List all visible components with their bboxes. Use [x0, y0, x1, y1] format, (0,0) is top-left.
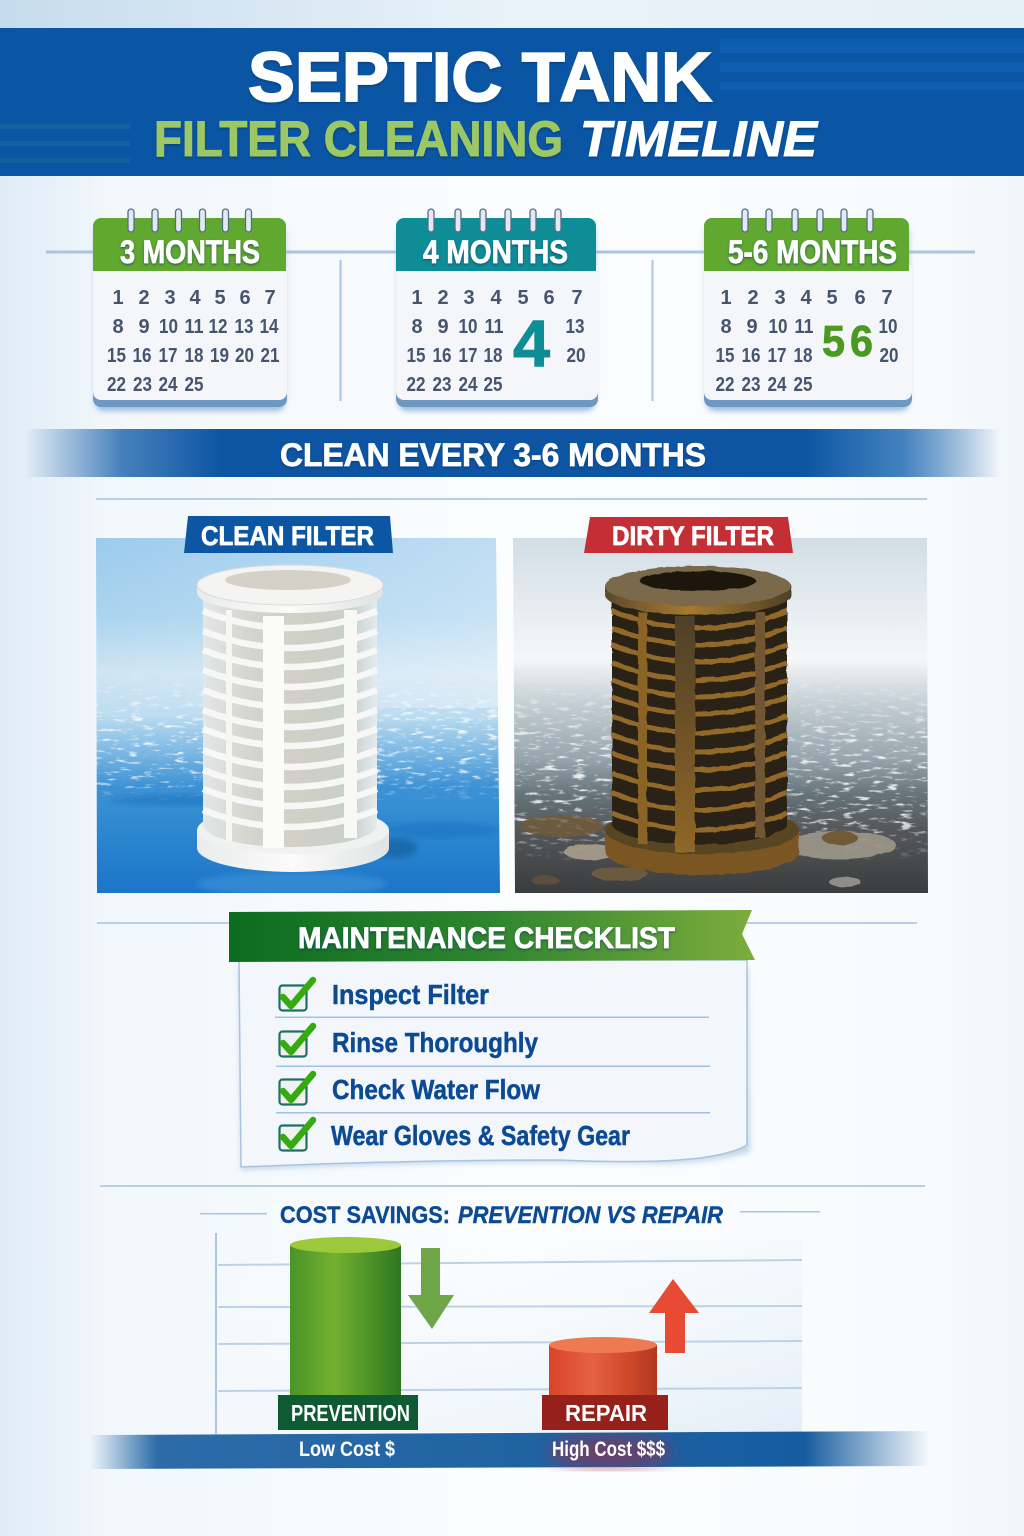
illustration: clean filter cartridge: [197, 565, 389, 872]
bar: repair: [549, 1337, 657, 1400]
label: dirty filter: DIRTY FILTER: [612, 521, 774, 551]
dates: 2: [747, 287, 759, 309]
dates: 8: [720, 316, 732, 338]
top background strip: [0, 0, 1024, 28]
dates: 10: [878, 316, 898, 338]
dates: 7: [264, 287, 276, 309]
photo: murky water: [510, 538, 935, 893]
label: clean filter: CLEAN FILTER: [201, 521, 374, 551]
section divider: [100, 1185, 925, 1187]
dates: 16: [432, 345, 452, 367]
dates: 24: [158, 374, 178, 396]
dates: 7: [881, 287, 893, 309]
dates: 2: [437, 287, 449, 309]
dates: 18: [794, 345, 812, 367]
calendar: 4 months: [396, 209, 598, 411]
bar: prevention: [290, 1237, 401, 1400]
illustration: clogged filter cartridge: [605, 566, 799, 875]
dates: 20: [566, 345, 586, 367]
dates: 23: [432, 374, 452, 396]
photo: clean water: [90, 538, 510, 896]
highlighted dates 5 6: 6: [850, 317, 873, 366]
dates: 1: [411, 287, 423, 309]
dates: 20: [880, 345, 898, 367]
dates: 15: [406, 345, 426, 367]
panel: clean filter: [90, 516, 510, 896]
dates: 3: [164, 287, 176, 309]
section divider: [96, 498, 927, 500]
dates: 25: [484, 374, 502, 396]
dates: 10: [458, 316, 478, 338]
dates: 3: [463, 287, 475, 309]
chart heading: COST SAVINGS:: [280, 1202, 450, 1229]
label: repair: [542, 1395, 668, 1430]
section divider: [97, 922, 917, 924]
frequency text: CLEAN EVERY 3-6 MONTHS: [280, 437, 706, 473]
divider left: [340, 260, 342, 401]
dates: 23: [133, 374, 152, 396]
dates: 17: [768, 345, 786, 367]
dates: 1: [720, 287, 732, 309]
calendar: 3 months: [93, 209, 287, 411]
panel: dirty filter: [510, 517, 935, 893]
dates: 6: [239, 287, 251, 309]
arrow: cost up: [649, 1279, 699, 1353]
dates: 9: [138, 316, 150, 338]
dates: 19: [210, 345, 229, 367]
caption: high cost: High Cost $$$: [552, 1438, 665, 1461]
dates: 18: [184, 345, 204, 367]
frequency banner: [25, 429, 1000, 477]
dates: 10: [159, 316, 178, 338]
divider right: [652, 260, 654, 401]
dates: [406, 287, 586, 396]
bar chart: prevention vs repair: [90, 1233, 930, 1469]
dates: 15: [107, 345, 126, 367]
dates: 6: [543, 287, 555, 309]
dates: [716, 287, 898, 396]
dates: 22: [716, 374, 734, 396]
subtitle: FILTER CLEANING: [154, 111, 563, 167]
dates: 4: [189, 287, 201, 309]
label: repair: REPAIR: [565, 1400, 647, 1426]
dates: 18: [484, 345, 502, 367]
timeline line: [46, 250, 975, 254]
checklist item: wear gloves: Wear Gloves & Safety Gear: [331, 1120, 630, 1151]
checklist item: inspect filter: [280, 979, 489, 1010]
rings: [428, 209, 561, 232]
label: prevention: [278, 1395, 418, 1430]
dates: 14: [260, 316, 279, 338]
header banner: [0, 28, 1024, 176]
rings: [742, 209, 873, 232]
dates: 9: [746, 316, 758, 338]
dates: 16: [742, 345, 760, 367]
dates: 11: [484, 316, 504, 338]
dates: 4: [800, 287, 812, 309]
dates: 1: [112, 287, 124, 309]
dates: 8: [112, 316, 124, 338]
highlighted dates 5 6: 5: [822, 317, 845, 366]
dates: 6: [854, 287, 866, 309]
month label: 4 MONTHS: [423, 234, 568, 270]
checklist item: rinse thoroughly: Rinse Thoroughly: [332, 1027, 538, 1058]
caption: low cost: Low Cost $: [299, 1438, 395, 1461]
dates: 2: [138, 287, 150, 309]
dates: 25: [794, 374, 812, 396]
dates: 25: [184, 374, 204, 396]
arrow: cost down: [408, 1248, 454, 1329]
checklist banner: [229, 910, 755, 962]
dates: 24: [768, 374, 787, 396]
dates: 7: [571, 287, 583, 309]
paper card: [239, 960, 747, 1167]
dates: 5: [826, 287, 838, 309]
dates: 10: [768, 316, 788, 338]
dates: 11: [794, 316, 814, 338]
dates: 3: [774, 287, 786, 309]
dates: 5: [517, 287, 529, 309]
dates: 13: [566, 316, 584, 338]
checklist item: inspect filter: Inspect Filter: [332, 979, 489, 1010]
checklist item: rinse thoroughly: [280, 1026, 538, 1058]
title: SEPTIC TANK: [248, 38, 712, 116]
dates: 24: [458, 374, 478, 396]
rings: [128, 209, 252, 232]
checklist banner: MAINTENANCE CHECKLIST: [298, 922, 675, 955]
highlighted date 4: 4: [513, 306, 550, 380]
panel: maintenance checklist: [229, 910, 755, 1170]
dates: 17: [458, 345, 478, 367]
dates: 4: [490, 287, 502, 309]
checklist item: check water flow: Check Water Flow: [332, 1074, 540, 1105]
chart heading: PREVENTION VS REPAIR: [458, 1202, 724, 1229]
dates: 9: [437, 316, 449, 338]
subtitle: [154, 111, 819, 167]
label: prevention: PREVENTION: [291, 1400, 410, 1426]
dates: 15: [716, 345, 734, 367]
month label: 5-6 MONTHS: [728, 234, 897, 270]
dates: 5: [214, 287, 226, 309]
dates: 20: [235, 345, 254, 367]
subtitle: TIMELINE: [580, 111, 819, 167]
highlighted dates 5 6: [822, 317, 873, 366]
dates: 16: [132, 345, 152, 367]
dates: 23: [742, 374, 760, 396]
dates: 22: [107, 374, 126, 396]
dates: 22: [406, 374, 426, 396]
month label: 3 MONTHS: [120, 234, 260, 270]
dates: 8: [411, 316, 423, 338]
dates: 17: [158, 345, 178, 367]
dates: 12: [208, 316, 228, 338]
dates: 21: [260, 345, 280, 367]
chart heading: [200, 1202, 820, 1229]
dates: [107, 287, 280, 396]
calendar: 5-6 months: [704, 209, 912, 411]
dates: 13: [234, 316, 254, 338]
bottom band: [90, 1431, 930, 1469]
dates: 11: [184, 316, 204, 338]
